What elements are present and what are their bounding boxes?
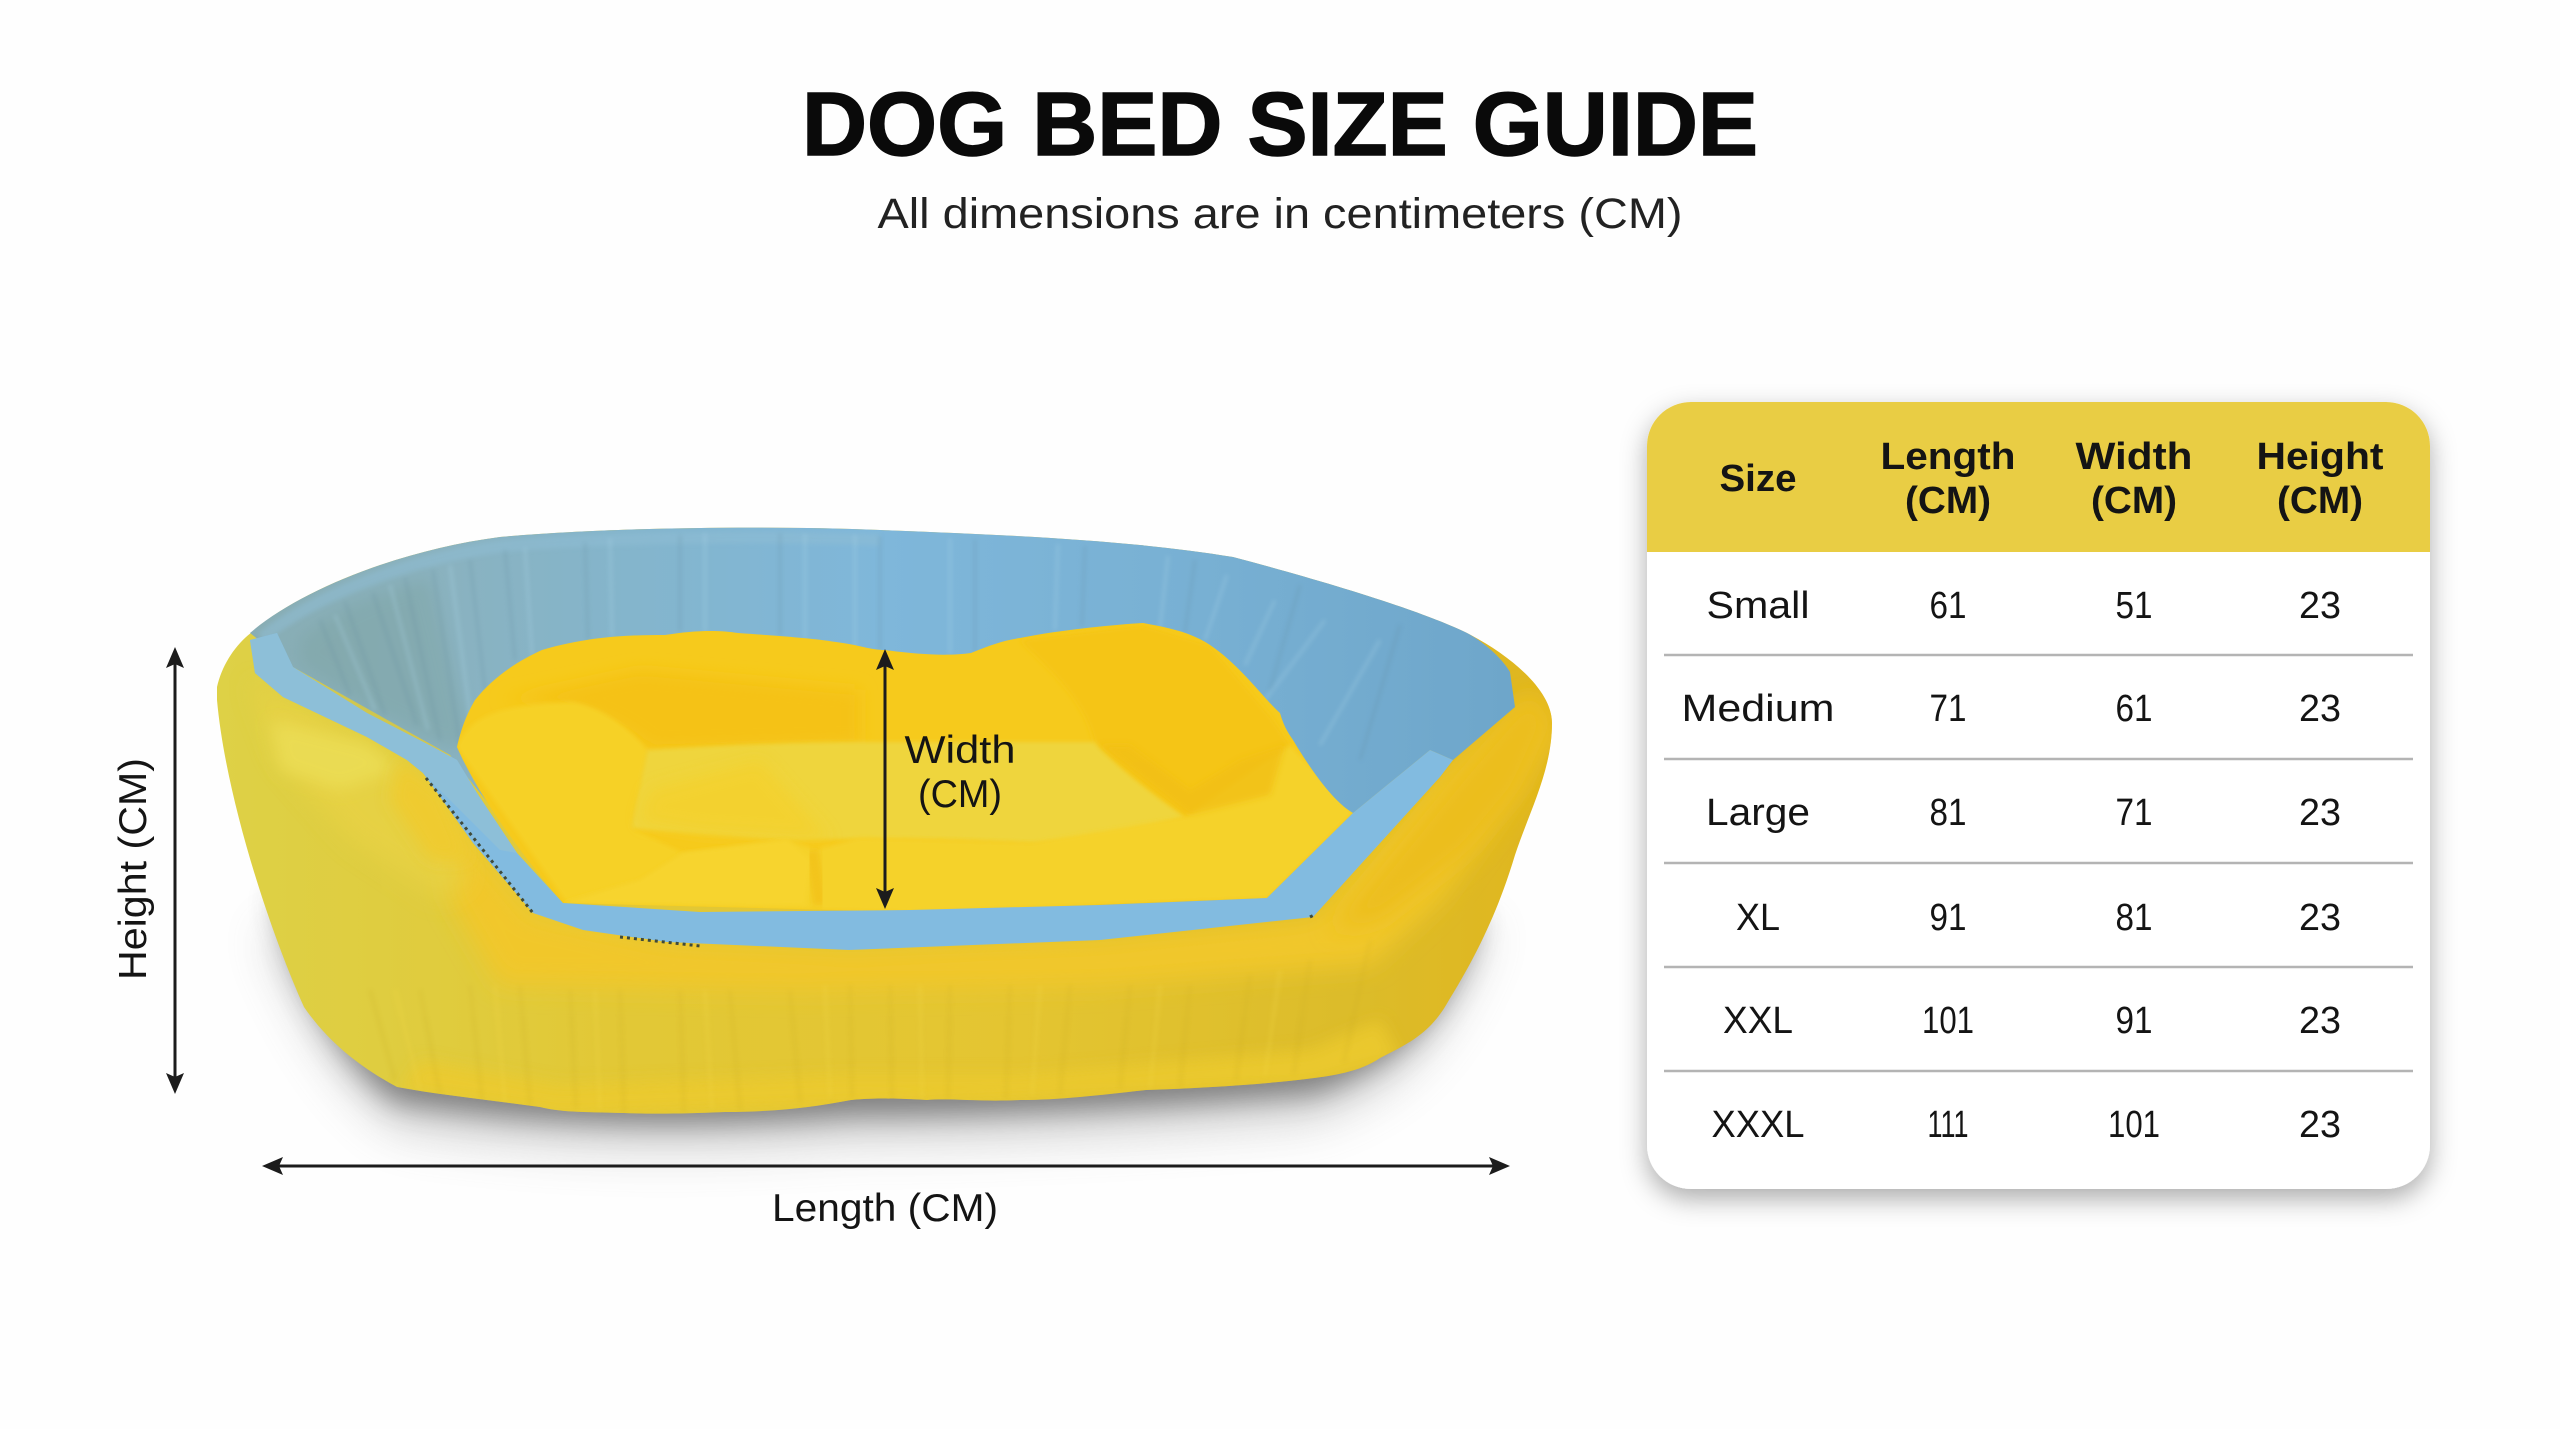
row: Small: 51 <box>2116 585 2152 627</box>
row: Large: 81 <box>1930 792 1966 834</box>
height arrow <box>166 647 184 1094</box>
row: XL: XL <box>1736 897 1780 939</box>
row: Small <box>1706 585 2341 627</box>
row: Large: Large <box>1706 792 1810 834</box>
rim left lighter tint <box>250 633 517 853</box>
row: XXXL: 101 <box>2108 1104 2160 1146</box>
row: XXL <box>1723 1000 2341 1042</box>
row: Large <box>1706 792 2341 834</box>
row: Large: 71 <box>2116 792 2152 834</box>
rim stitching <box>426 778 1316 946</box>
table header <box>1647 402 2430 552</box>
row: XXL: 91 <box>2116 1000 2152 1042</box>
table card <box>1647 402 2430 1189</box>
wall top rim band <box>262 538 880 638</box>
bed body shading and folds <box>250 680 1552 1115</box>
title: DOG BED SIZE GUIDE <box>802 75 1758 175</box>
cushion folds and shading <box>457 625 1353 912</box>
row: XL: 81 <box>2116 897 2152 939</box>
width arrow <box>876 649 894 909</box>
right lower orange crease <box>1190 750 1285 816</box>
bed floor shadow <box>263 896 1491 1154</box>
row: Medium: Medium <box>1682 688 1834 730</box>
left bolster <box>457 702 683 903</box>
row: Small: 23 <box>2299 585 2341 627</box>
table header: (CM) <box>2091 480 2177 522</box>
row: XXXL: 23 <box>2299 1104 2341 1146</box>
row: Medium: 23 <box>2299 688 2341 730</box>
right bolster <box>1022 623 1264 734</box>
wall dark pleats <box>320 533 1400 760</box>
height label: Height (CM) <box>112 758 155 980</box>
row: Medium: 71 <box>1930 688 1966 730</box>
panel: size table <box>1647 402 2430 1189</box>
row: XL: 91 <box>1930 897 1966 939</box>
row: XL <box>1736 897 2341 939</box>
row: XXXL <box>1712 1104 2341 1146</box>
bed inner blue wall <box>250 528 1515 903</box>
wall light pleats <box>335 533 1380 745</box>
row: Small: Small <box>1706 585 1810 627</box>
width label: Width <box>904 729 1016 772</box>
back cushion orange <box>556 676 858 744</box>
row: Medium: 61 <box>2116 688 2152 730</box>
left front puff <box>563 840 810 905</box>
front crease <box>812 850 820 905</box>
cushion <box>457 623 1353 912</box>
table header: Size <box>1720 458 1796 500</box>
row: XXXL: XXXL <box>1712 1104 1804 1146</box>
subtitle: All dimensions are in centimeters (CM) <box>878 190 1682 238</box>
row: Small: 61 <box>1930 585 1966 627</box>
table header: Length <box>1880 436 2016 478</box>
centre panel warm tint <box>646 764 817 836</box>
table header: Width <box>2076 436 2192 478</box>
table header: Height <box>2256 436 2384 478</box>
width label: (CM) <box>918 773 1002 816</box>
table header: (CM) <box>2277 480 2363 522</box>
front blue rim <box>250 633 1453 950</box>
dog bed illustration <box>217 528 1552 1154</box>
length label: Length (CM) <box>772 1187 998 1230</box>
length arrow <box>262 1157 1510 1175</box>
row: XXL: XXL <box>1723 1000 1793 1042</box>
row: XXXL: 111 <box>1928 1104 1968 1146</box>
row: Large: 23 <box>2299 792 2341 834</box>
width label <box>904 729 1016 816</box>
front roll <box>706 746 1353 910</box>
row: XXL: 101 <box>1922 1000 1974 1042</box>
row: XXL: 23 <box>2299 1000 2341 1042</box>
row: XL: 23 <box>2299 897 2341 939</box>
table header: (CM) <box>1905 480 1991 522</box>
row: Medium <box>1682 688 2341 730</box>
left wall shading <box>300 578 470 750</box>
bed outer body <box>217 528 1552 1114</box>
centre panel <box>631 742 1185 843</box>
